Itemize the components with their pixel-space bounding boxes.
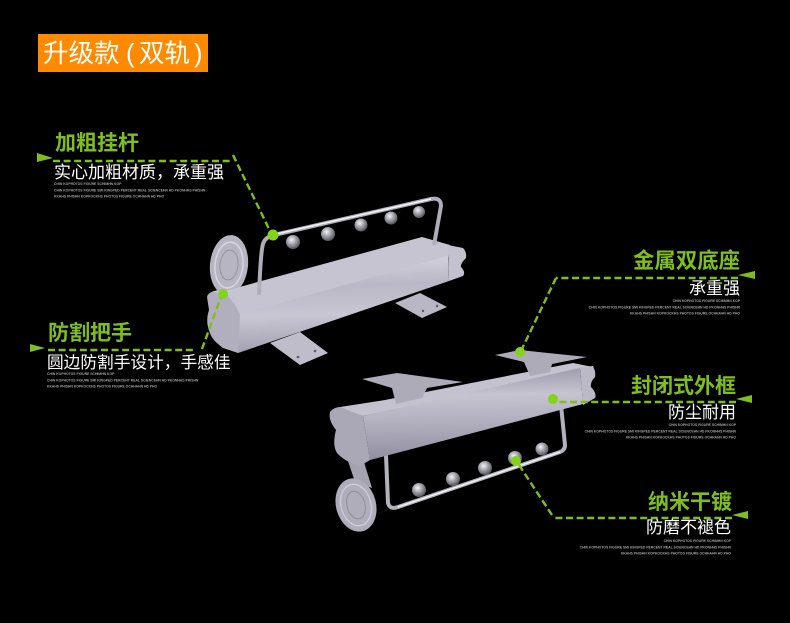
- anchor dot: [515, 347, 525, 357]
- callout: thick rod: [37, 132, 278, 240]
- fine print: CHIN KOPHOTOS FIGURE SMI KINGPED PERCENT REAL SCIENCEHN HD PKONHHS PHISHN: [54, 188, 206, 192]
- arrow: [37, 153, 53, 162]
- heading: 封闭式外框: [631, 375, 736, 398]
- ring tag: [207, 233, 251, 297]
- fine print: KKAHS PHISHN KOPKOCKHS PHOTOS FIGURE OCHHAHN HD PHO: [47, 384, 158, 388]
- heading: 防割把手: [48, 322, 132, 345]
- fine print: KKAHS PHISHN KOPKOCKHS PHOTOS FIGURE OCHHAHN HD PHO: [621, 552, 731, 556]
- fine print: CHIN KOPHOTOS FIGURE SCHIMHN KOP: [54, 182, 122, 186]
- fine print: [589, 299, 741, 316]
- hanging balls: [412, 442, 548, 497]
- callout: metal double base: [515, 248, 755, 357]
- leader line: [48, 349, 195, 351]
- right foot: [495, 350, 587, 376]
- header badge: 双轨: [139, 40, 190, 68]
- anchor dot: [268, 230, 278, 240]
- rod: [386, 405, 565, 508]
- right end cap: [580, 366, 596, 405]
- header badge: ): [194, 40, 202, 68]
- heading: 纳米干镀: [648, 491, 732, 514]
- subtitle: 实心加粗材质，承重强: [54, 163, 224, 182]
- leader line: [552, 517, 732, 519]
- fine print: [47, 372, 199, 388]
- callout: nano plating: [511, 456, 748, 556]
- fine print: CHIN KOPHOTOS FIGURE SMI KINGPED PERCENT REAL SCIENCEHN HD PKONHHS PHISHN: [589, 306, 741, 310]
- fine print: CHIN KOPHOTOS FIGURE SCHIMHN KOP: [47, 372, 115, 376]
- top face: [330, 363, 593, 416]
- subtitle: 防尘耐用: [668, 403, 736, 422]
- foot screw holes: [297, 305, 438, 358]
- fine print: CHIN KOPHOTOS FIGURE SCHIMHN KOP: [669, 423, 737, 427]
- left foot: [362, 373, 463, 404]
- callout: anti-cut handle: [30, 289, 231, 388]
- heading: 金属双底座: [633, 248, 740, 273]
- arrow: [738, 271, 755, 279]
- leader line: [53, 160, 233, 162]
- subtitle: 圆边防割手设计，手感佳: [47, 353, 231, 372]
- fine print: [54, 182, 206, 198]
- leader line: [556, 277, 738, 279]
- fine print: KKAHS PHISHN KOPKOCKHS PHOTOS FIGURE OCHHAHN HD PHO: [630, 312, 740, 316]
- heading: 加粗挂杆: [55, 132, 139, 155]
- left end cap: [330, 407, 370, 466]
- front face: [238, 256, 449, 353]
- header badge: 升级款: [43, 40, 120, 68]
- header badge: [38, 34, 208, 72]
- fine print: CHIN KOPHOTOS FIGURE SMI KINGPED PERCENT REAL SCIENCEHN HD PKONHHS PHISHN: [585, 430, 737, 434]
- left end cap: [207, 292, 240, 353]
- anchor dot: [548, 394, 558, 404]
- callout: closed frame: [548, 375, 752, 440]
- rod: [259, 199, 441, 295]
- fine print: KKAHS PHISHN KOPKOCKHS PHOTOS FIGURE OCHHAHN HD PHO: [626, 436, 736, 440]
- arrow: [736, 395, 752, 403]
- product: lower rail with hanging rod: [330, 350, 596, 536]
- far foot: [395, 293, 447, 318]
- fine print: KKAHS PHISHN KOPKOCKHS PHOTOS FIGURE OCHHAHN HD PHO: [54, 194, 165, 198]
- leader line: [553, 401, 736, 403]
- front face: [363, 368, 583, 460]
- top face: [210, 237, 450, 315]
- subtitle: 承重强: [689, 279, 740, 298]
- anchor dot: [511, 456, 521, 466]
- fine print: CHIN KOPHOTOS FIGURE SMI KINGPED PERCENT REAL SCIENCEHN HD PKONHHS PHISHN: [47, 378, 199, 382]
- right end cap: [448, 245, 466, 281]
- arrow: [30, 344, 45, 352]
- ring tag: [330, 455, 382, 536]
- hanging balls: [286, 206, 425, 249]
- subtitle: 防磨不褪色: [646, 518, 731, 537]
- fine print: [580, 539, 732, 556]
- header badge: (: [126, 40, 135, 68]
- fine print: [585, 423, 737, 440]
- fine print: CHIN KOPHOTOS FIGURE SMI KINGPED PERCENT REAL SCIENCEHN HD PKONHHS PHISHN: [580, 546, 732, 550]
- fine print: CHIN KOPHOTOS FIGURE SCHIMHN KOP: [664, 539, 732, 543]
- arrow: [732, 511, 748, 519]
- anchor dot: [218, 289, 228, 299]
- product: upper rail with hanging rod: [207, 199, 466, 365]
- near foot: [270, 332, 328, 365]
- fine print: CHIN KOPHOTOS FIGURE SCHIMHN KOP: [673, 299, 741, 303]
